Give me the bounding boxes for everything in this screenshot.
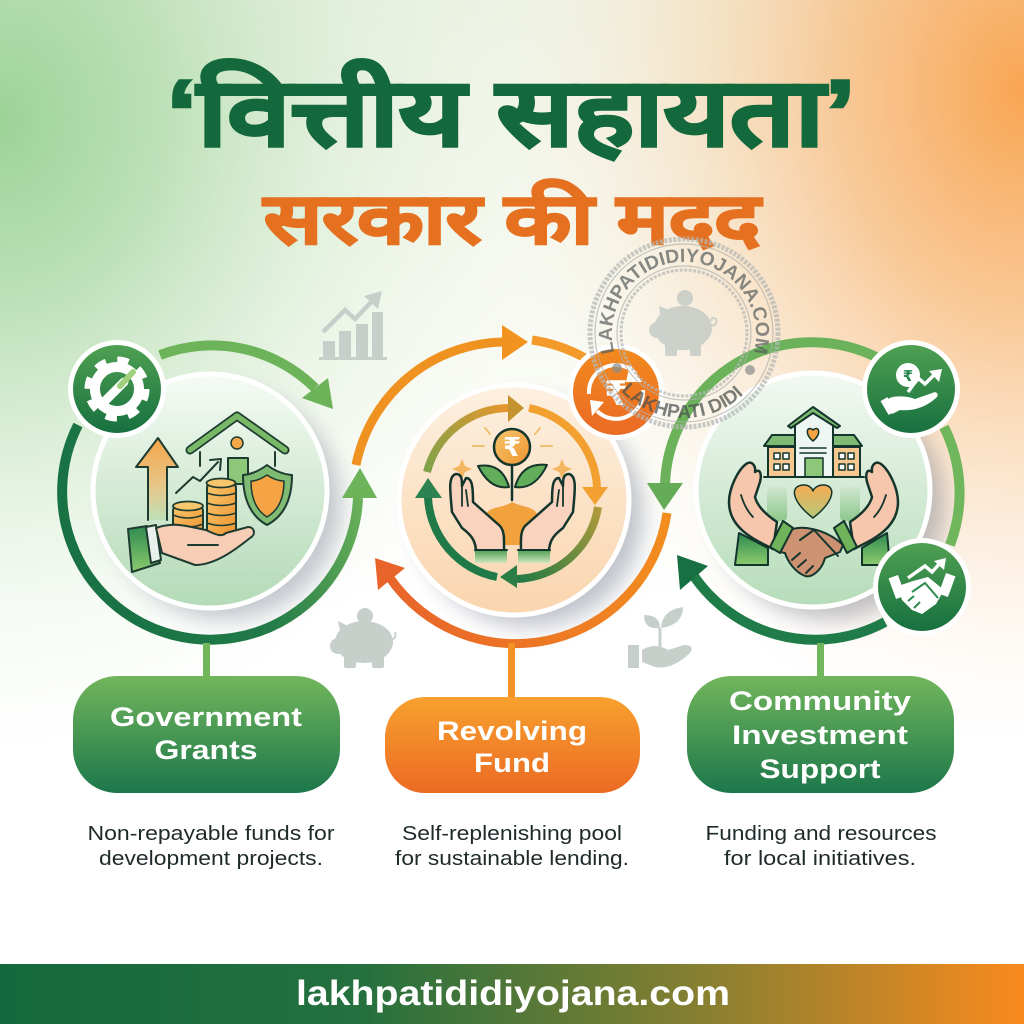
- panel: right cycle: [647, 340, 971, 640]
- pill: Government Grants: Grants: [154, 735, 258, 765]
- center disc shadow: [417, 401, 643, 627]
- pill: Revolving Fund: [385, 697, 640, 793]
- icon: community building and handshake: [729, 407, 898, 576]
- badge: rupee cycle: [568, 344, 664, 440]
- stamp dots: [612, 363, 755, 375]
- icon: faded plant in hand: [628, 607, 692, 668]
- pill: Revolving Fund: Fund: [474, 748, 550, 778]
- small coin stack: [173, 502, 203, 533]
- description: Revolving Fund: [395, 823, 629, 870]
- pill: Community Investment Support: Support: [760, 754, 881, 784]
- pill: Revolving Fund: Revolving: [437, 716, 587, 746]
- icon: hands holding rupee plant: [450, 428, 575, 563]
- description: Government Grants: [88, 823, 335, 870]
- description: Community Investment Support: Funding and resources: [706, 823, 936, 845]
- footer bar: [0, 964, 1024, 1024]
- center disc: [399, 385, 629, 615]
- pill: Government Grants: [73, 676, 340, 793]
- pill: Government Grants: Government: [110, 702, 302, 732]
- description: Revolving Fund: Self-replenishing pool: [402, 823, 622, 845]
- right disc: [696, 373, 930, 607]
- large coin stack: [206, 478, 236, 538]
- stamp lower text: LAKHPATI DIDI: [622, 382, 743, 418]
- pill: Community Investment Support: Community: [729, 686, 911, 716]
- panel: center cycle: [356, 325, 667, 644]
- description: Revolving Fund: for sustainable lending.: [395, 848, 629, 870]
- footer bar: lakhpatididiyojana.com: [296, 974, 730, 1013]
- badge: gear and wrench: [68, 340, 166, 438]
- panel: left cycle: [62, 340, 377, 640]
- icon: hand with coins, house and shield: [128, 416, 292, 572]
- right disc shadow: [715, 390, 945, 620]
- left disc shadow: [111, 390, 341, 620]
- left disc: [93, 374, 327, 608]
- connector: right: [817, 643, 824, 677]
- description: Community Investment Support: [706, 823, 936, 870]
- badge: handshake growth: [873, 538, 971, 636]
- center outer ring arrows: [356, 325, 667, 644]
- connector: center: [508, 643, 515, 698]
- badge: rupee cycle: ₹: [604, 374, 628, 414]
- stamp piggy bank: [649, 290, 716, 356]
- connector: left: [203, 643, 210, 677]
- description: Government Grants: development projects.: [99, 848, 323, 870]
- rupee symbol: ₹: [503, 433, 521, 463]
- pill: Community Investment Support: Investment: [732, 720, 908, 750]
- right ring arrows: [647, 342, 960, 640]
- center inner ring arrows: [415, 395, 608, 588]
- badge: hand with rupee growth: ₹: [903, 367, 913, 385]
- left ring arrows: [62, 345, 377, 640]
- icon: faded piggy bank: [330, 608, 395, 668]
- pill: Community Investment Support: [687, 676, 954, 793]
- description: Government Grants: Non-repayable funds for: [88, 823, 335, 845]
- description: Community Investment Support: for local initiatives.: [724, 848, 916, 870]
- title: ‘वित्तीय सहायता’: [166, 59, 856, 165]
- badge: hand with rupee growth: [862, 340, 960, 438]
- watermark stamp: [588, 236, 780, 430]
- subtitle: सरकार की मदद: [262, 179, 762, 258]
- stamp text: LAKHPATIDIDIYOJANA.COM: [598, 248, 770, 354]
- icon: faded bar chart: [319, 291, 387, 360]
